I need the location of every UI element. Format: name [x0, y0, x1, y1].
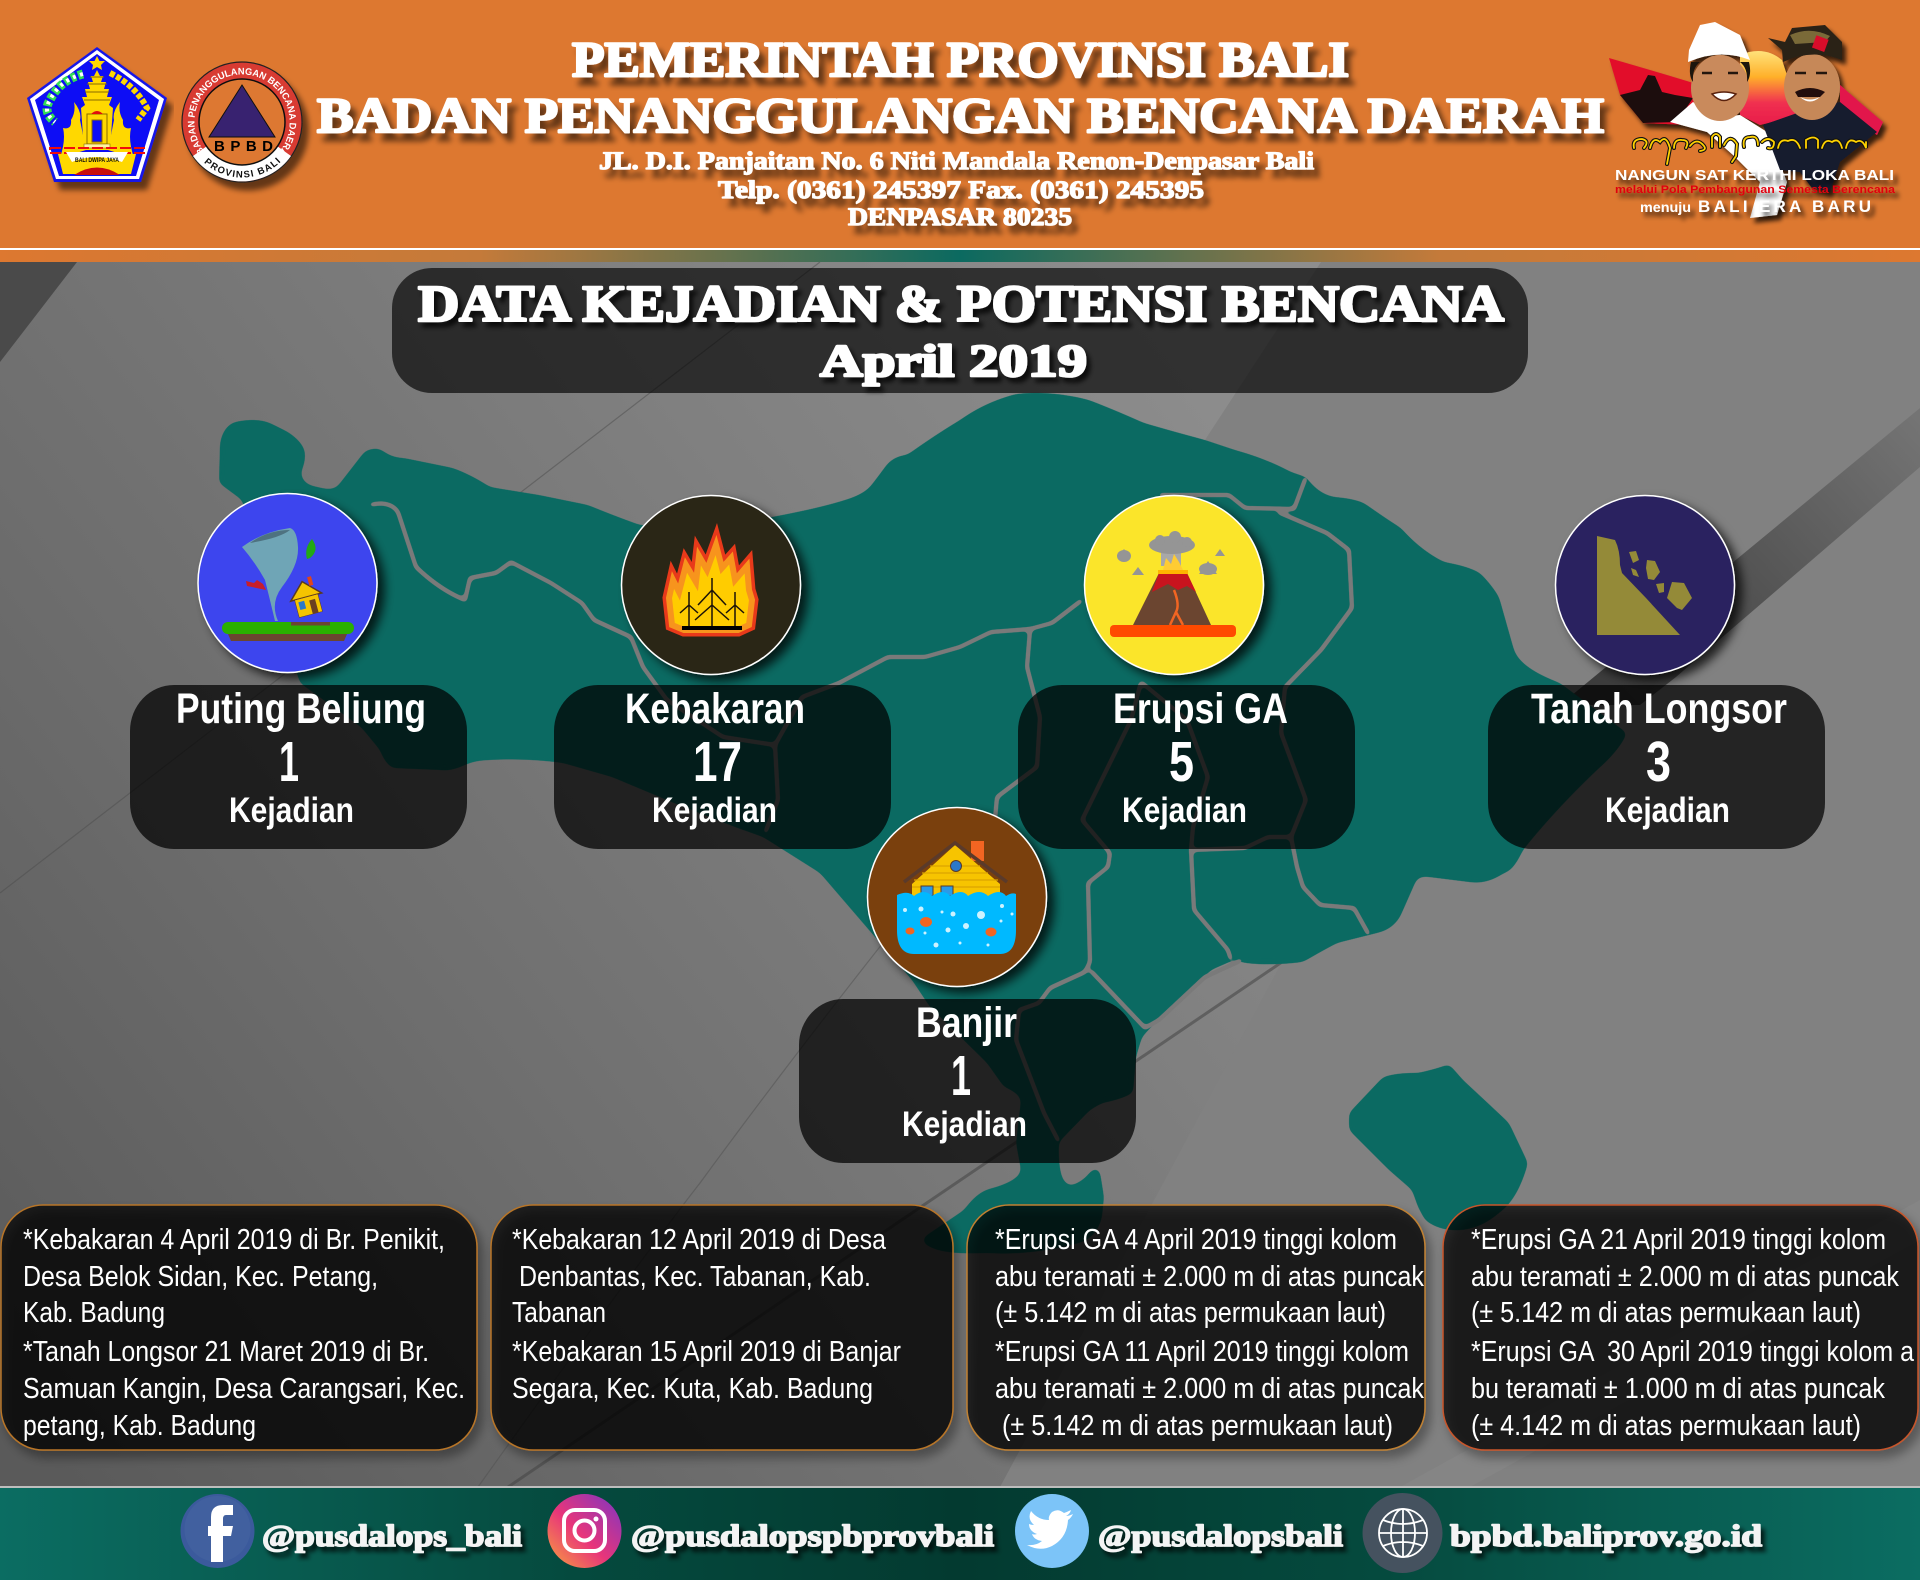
card: Erupsi GA: [1018, 685, 1355, 849]
motto: NANGUN SAT KERTHI LOKA BALI: [1615, 167, 1894, 184]
panel: notes Kebakaran Tabanan and Kuta: *Kebakaran 15 April 2019 di Banjar: [512, 1336, 901, 1368]
footer handle: twitter: @pusdalopsbali: [1098, 1518, 1343, 1553]
footer band: [0, 1486, 1920, 1580]
map: Bali island: [219, 393, 1627, 1254]
header text block: [317, 31, 1604, 231]
label: Puting Beliung: [176, 685, 426, 733]
island silhouette with portraits: [1609, 22, 1883, 218]
logo: Nangun Sat Kerthi Loka Bali portrait map: [1609, 22, 1896, 218]
icon: facebook: [180, 1494, 254, 1568]
panel: notes Kebakaran and Tanah Longsor: Kab. Badung: [23, 1297, 165, 1329]
logo: Provinsi Bali emblem: BALI DWIPA JAYA: [75, 157, 119, 164]
heading: government name: PEMERINTAH PROVINSI BALI: [572, 31, 1349, 87]
panel: notes Erupsi GA 21 and 30 April: (± 4.142 m di atas permukaan laut): [1471, 1410, 1861, 1442]
panel: notes Kebakaran Tabanan and Kuta: Tabanan: [512, 1297, 606, 1329]
logo: Provinsi Bali emblem: [27, 47, 167, 182]
panel: notes Kebakaran Tabanan and Kuta: *Kebakaran 12 April 2019 di Desa: [512, 1224, 887, 1256]
panel: notes Kebakaran and Tanah Longsor: Samuan Kangin, Desa Carangsari, Kec.: [23, 1373, 465, 1405]
logo: BPBD: PROVINSI BALI: [204, 157, 280, 178]
panel: notes Kebakaran Tabanan and Kuta: [491, 1205, 953, 1450]
motto: melalui Pola Pembangunan Semesta Berencana: [1615, 184, 1896, 196]
card: Kebakaran: [554, 685, 891, 849]
phone line: Telp. (0361) 245397 Fax. (0361) 245395: [718, 177, 1204, 204]
icon: instagram: [548, 1494, 622, 1568]
panel: notes Kebakaran and Tanah Longsor: *Tanah Longsor 21 Maret 2019 di Br.: [23, 1336, 429, 1368]
unit: Kejadian: [1122, 791, 1247, 830]
motto: [1615, 167, 1896, 216]
card: Puting Beliung: [130, 685, 467, 849]
icon: forest fire: [622, 496, 800, 674]
logo: BPBD: BPBD: [214, 138, 273, 155]
icon: flood: [868, 808, 1046, 986]
panel: notes Kebakaran Tabanan and Kuta: Segara, Kec. Kuta, Kab. Badung: [512, 1373, 873, 1405]
map: Nusa Penida island: [1349, 1064, 1528, 1230]
icon: volcano: [1084, 496, 1264, 674]
panel: notes Erupsi GA 4 and 11 April: [967, 1205, 1425, 1450]
count: 1: [279, 730, 299, 794]
panel: notes Kebakaran and Tanah Longsor: *Kebakaran 4 April 2019 di Br. Penikit,: [23, 1224, 445, 1256]
map: regency boundaries: [370, 477, 1369, 1142]
icon: tornado: [198, 494, 377, 672]
motto: BALI ERA BARU: [1698, 197, 1871, 216]
panel: notes Erupsi GA 4 and 11 April: abu teramati ± 2.000 m di atas puncak: [995, 1373, 1424, 1405]
count: 3: [1646, 730, 1671, 794]
background: grey textured panel: [0, 262, 1920, 1488]
unit: Kejadian: [652, 791, 777, 830]
label: Tanah Longsor: [1531, 685, 1787, 733]
title box: [392, 268, 1528, 393]
count: 1: [951, 1044, 971, 1108]
unit: Kejadian: [902, 1105, 1027, 1144]
motto: menuju: [1640, 199, 1691, 215]
panel: notes Erupsi GA 21 and 30 April: [1443, 1205, 1918, 1450]
address line: JL. D.I. Panjaitan No. 6 Niti Mandala Renon-Denpasar Bali: [599, 148, 1314, 175]
panel: notes Erupsi GA 4 and 11 April: (± 5.142 m di atas permukaan laut): [995, 1297, 1386, 1329]
footer handle: instagram: @pusdalopspbprovbali: [631, 1518, 994, 1553]
title text: DATA KEJADIAN & POTENSI BENCANA: [418, 276, 1504, 333]
panel: notes Erupsi GA 21 and 30 April: (± 5.142 m di atas permukaan laut): [1471, 1297, 1861, 1329]
panel: notes Erupsi GA 4 and 11 April: (± 5.142 m di atas permukaan laut): [1002, 1410, 1393, 1442]
unit: Kejadian: [1605, 791, 1730, 830]
panel: notes Kebakaran and Tanah Longsor: petang, Kab. Badung: [23, 1410, 256, 1442]
Balinese script motif: [1634, 134, 1866, 164]
footer handle: facebook: @pusdalops_bali: [262, 1518, 522, 1553]
panel: notes Kebakaran Tabanan and Kuta: Denbantas, Kec. Tabanan, Kab.: [519, 1261, 871, 1293]
card: Banjir: [799, 999, 1136, 1163]
logo: BPBD: [181, 61, 312, 194]
count: 17: [693, 730, 742, 794]
panel: notes Erupsi GA 4 and 11 April: abu teramati ± 2.000 m di atas puncak: [995, 1261, 1424, 1293]
city line: DENPASAR 80235: [848, 204, 1072, 231]
label: Kebakaran: [625, 685, 805, 733]
icon: landslide: [1556, 496, 1734, 674]
icon: website globe: [1362, 1493, 1442, 1573]
header band: [0, 0, 1920, 262]
card: Tanah Longsor: [1488, 685, 1825, 849]
icon: twitter: [1015, 1494, 1089, 1568]
footer website url: bpbd.baliprov.go.id: [1450, 1518, 1762, 1553]
map: main island outline: [219, 393, 1627, 1254]
label: Erupsi GA: [1113, 685, 1288, 733]
panel: notes Erupsi GA 4 and 11 April: *Erupsi GA 4 April 2019 tinggi kolom: [995, 1224, 1397, 1256]
heading: agency name: BADAN PENANGGULANGAN BENCANA DAERAH: [317, 87, 1604, 143]
label: Banjir: [916, 999, 1017, 1047]
panel: notes Kebakaran and Tanah Longsor: Desa Belok Sidan, Kec. Petang,: [23, 1261, 378, 1293]
subtitle date: April 2019: [820, 335, 1087, 386]
unit: Kejadian: [229, 791, 354, 830]
panel: notes Erupsi GA 4 and 11 April: *Erupsi GA 11 April 2019 tinggi kolom: [995, 1336, 1409, 1368]
panel: notes Kebakaran and Tanah Longsor: [1, 1205, 477, 1450]
count: 5: [1169, 730, 1194, 794]
